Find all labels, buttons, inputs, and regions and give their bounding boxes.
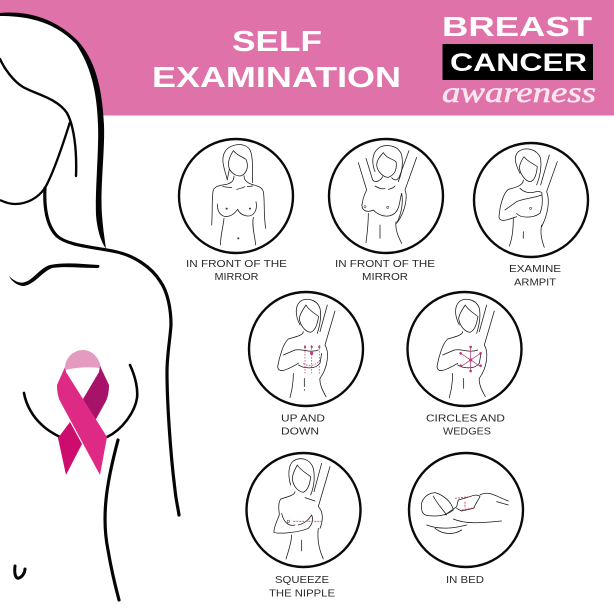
- step: circles and wedges: CIRCLES AND: [426, 412, 505, 424]
- step: examine armpit: ARMPIT: [514, 276, 557, 288]
- step: in front of the mirror, arms raised: MIRROR: [362, 271, 408, 283]
- step: in front of the mirror, arms raised: [329, 139, 443, 283]
- step: squeeze the nipple: SQUEEZE: [275, 574, 329, 586]
- step: up and down: DOWN: [281, 426, 319, 438]
- logo: breast cancer awareness: CANCER: [450, 49, 587, 77]
- step: in front of the mirror, arms down: IN FRONT OF THE: [186, 258, 287, 270]
- step: up and down: UP AND: [281, 412, 325, 424]
- large woman outline figure: [0, 13, 179, 600]
- logo: breast cancer awareness: BREAST: [442, 11, 592, 42]
- step: in bed: [409, 453, 523, 586]
- step: circles and wedges: [408, 292, 522, 438]
- title: [152, 26, 401, 94]
- step: examine armpit: [474, 143, 588, 288]
- step: in front of the mirror, arms raised: IN FRONT OF THE: [335, 258, 435, 270]
- step: in front of the mirror, arms down: MIRROR: [214, 271, 259, 283]
- logo: breast cancer awareness: [442, 11, 596, 109]
- step: up and down: [249, 292, 363, 438]
- logo: breast cancer awareness: awareness: [442, 76, 596, 109]
- icon: pink ribbon: [57, 350, 109, 475]
- title: EXAMINATION: [152, 62, 401, 94]
- step: in bed: IN BED: [446, 574, 484, 586]
- step: examine armpit: EXAMINE: [509, 263, 561, 275]
- header band: [0, 0, 614, 116]
- step: squeeze the nipple: THE NIPPLE: [269, 588, 335, 600]
- step: in front of the mirror, arms down: [179, 139, 293, 283]
- title: SELF: [232, 26, 322, 58]
- step: circles and wedges: WEDGES: [443, 426, 491, 438]
- step: squeeze the nipple: [246, 453, 360, 600]
